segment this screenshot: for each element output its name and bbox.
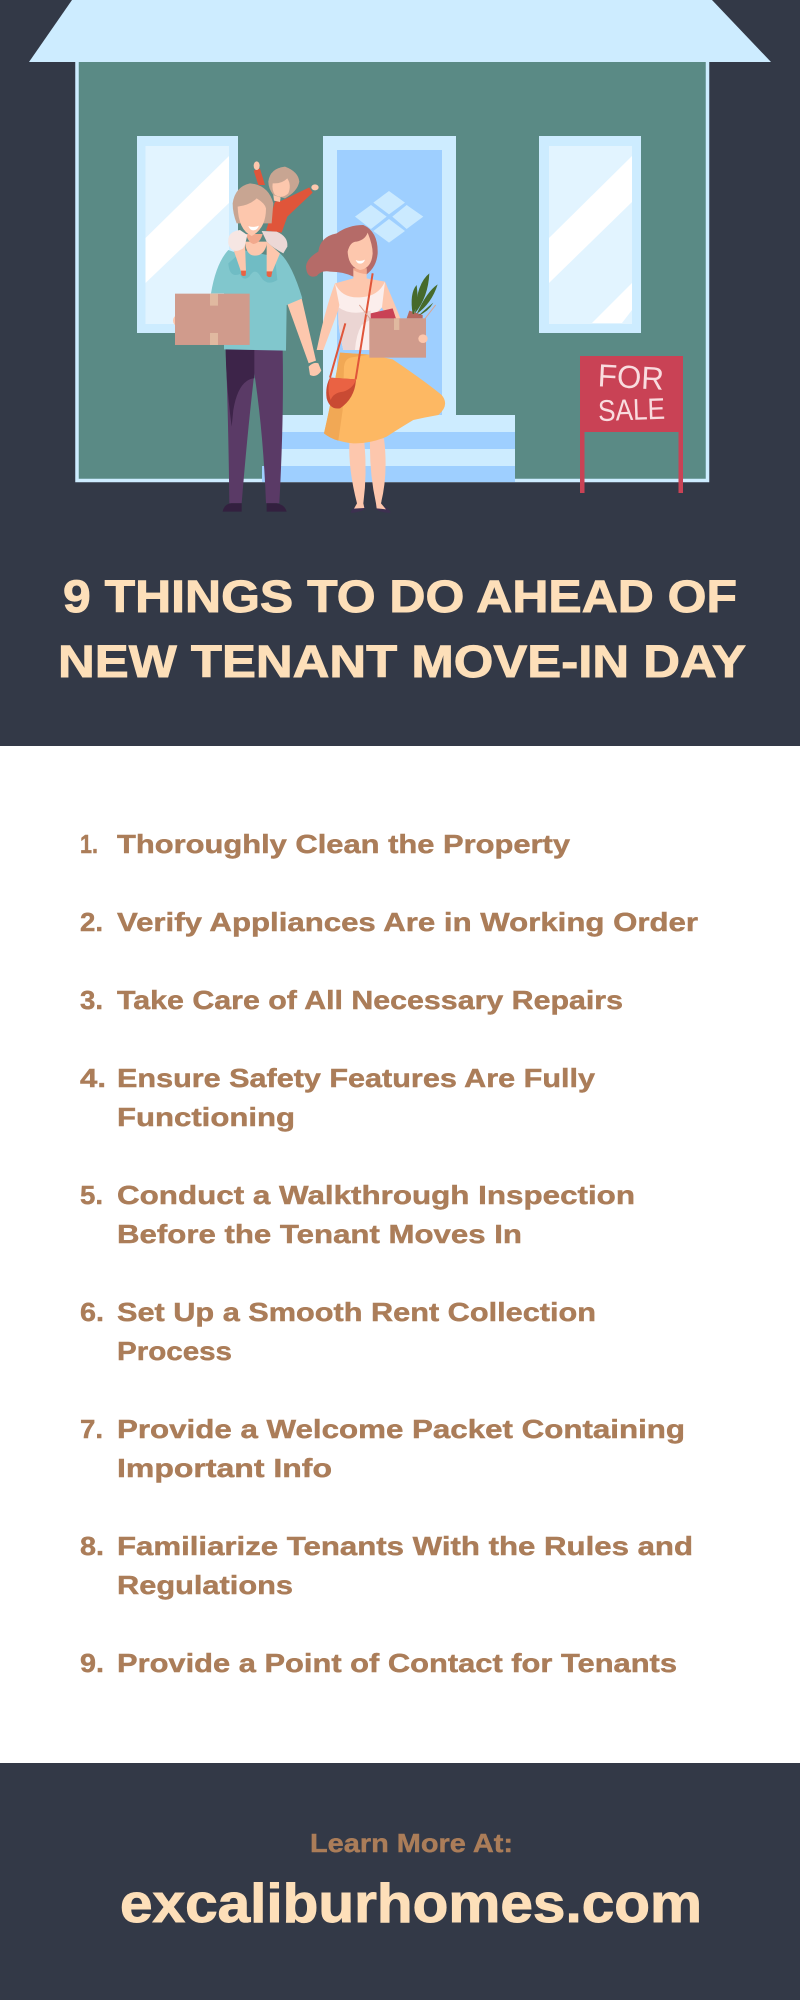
door — [323, 136, 456, 416]
title: NEW TENANT MOVE-IN DAY — [58, 636, 746, 687]
shoulder bag — [326, 273, 373, 409]
item 7: Important Info — [117, 1453, 332, 1483]
website: excaliburhomes.com — [120, 1872, 702, 1934]
item 7 — [80, 1414, 685, 1483]
item 8: Familiarize Tenants With the Rules and — [117, 1531, 693, 1561]
item 1: Thoroughly Clean the Property — [117, 829, 571, 859]
title: 9 THINGS TO DO AHEAD OF — [63, 571, 737, 622]
front steps — [262, 415, 515, 482]
item 5: Before the Tenant Moves In — [117, 1219, 522, 1249]
box with plant held by woman — [359, 273, 438, 358]
item 6: 6. — [80, 1297, 104, 1327]
panel: footer — [0, 1763, 800, 2000]
item 2: Verify Appliances Are in Working Order — [117, 907, 698, 937]
item 5: Conduct a Walkthrough Inspection — [117, 1180, 635, 1210]
illustration: family — [173, 161, 445, 513]
for sale sign — [580, 356, 683, 493]
item 6: Process — [117, 1336, 232, 1366]
item 8: Regulations — [117, 1570, 293, 1600]
for sale sign: SALE — [597, 393, 666, 428]
item 5: 5. — [80, 1180, 103, 1210]
panel: header background — [0, 0, 800, 746]
left window — [137, 136, 238, 333]
learn more label: Learn More At: — [310, 1828, 513, 1858]
item 8 — [80, 1531, 693, 1600]
man trousers — [223, 349, 287, 512]
man arm — [287, 298, 321, 376]
item 3: 3. — [80, 985, 103, 1015]
item 1: 1. — [80, 829, 98, 859]
item 7: 7. — [80, 1414, 103, 1444]
item 4: Ensure Safety Features Are Fully — [117, 1063, 596, 1093]
item 3: Take Care of All Necessary Repairs — [117, 985, 623, 1015]
illustration: house — [29, 0, 771, 482]
house wall — [77, 60, 708, 480]
item 8: 8. — [80, 1531, 104, 1561]
item 4: Functioning — [117, 1102, 295, 1132]
item 5 — [80, 1180, 635, 1249]
right window — [539, 136, 641, 333]
item 4 — [80, 1063, 596, 1132]
item 7: Provide a Welcome Packet Containing — [117, 1414, 685, 1444]
woman legs and shoes — [349, 438, 391, 513]
item 6: Set Up a Smooth Rent Collection — [117, 1297, 596, 1327]
man head — [233, 183, 273, 236]
panel: numbered list — [80, 829, 698, 1678]
child legs and man neck — [228, 230, 287, 277]
man shirt — [211, 250, 302, 351]
child arms and body — [254, 161, 319, 233]
item 2: 2. — [80, 907, 103, 937]
woman skirt — [324, 353, 445, 443]
roof — [29, 0, 771, 62]
item 9: 9. — [80, 1648, 104, 1678]
box held by man — [173, 294, 250, 345]
item 4: 4. — [80, 1063, 106, 1093]
woman torso and arms — [317, 268, 401, 350]
woman hair — [306, 225, 378, 277]
title — [58, 571, 746, 687]
for sale sign: FOR — [597, 357, 665, 397]
item 9: Provide a Point of Contact for Tenants — [117, 1648, 677, 1678]
item 6 — [80, 1297, 596, 1366]
woman face — [348, 233, 373, 270]
